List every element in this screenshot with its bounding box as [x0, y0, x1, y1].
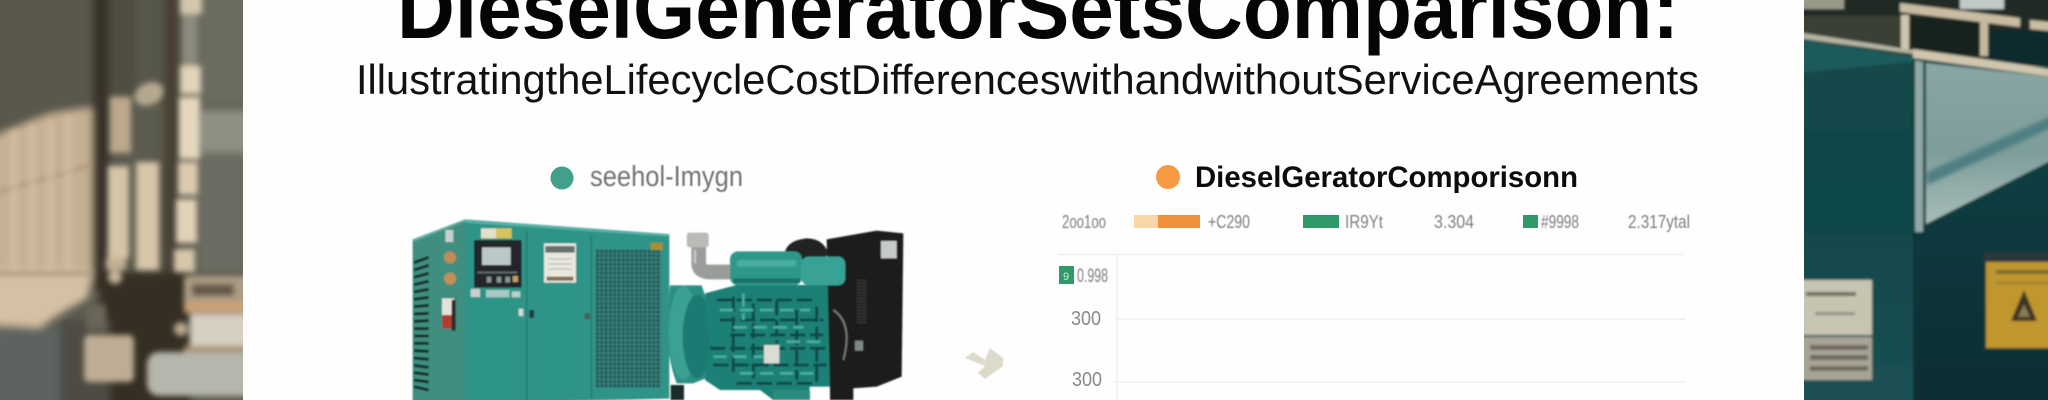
- chart legend row: [1062, 212, 1690, 232]
- cabinet front: [465, 219, 669, 400]
- legend: green swatch: [1303, 215, 1339, 228]
- chart: y axis label lower: 300: [1072, 369, 1102, 391]
- legend: green value: IR9Yt: [1345, 212, 1383, 232]
- warning label: [481, 228, 512, 238]
- photo: blurred industrial hall, left: [0, 0, 263, 400]
- subtitle: IllustratingtheLifecycleCostDifferenceswithandwithoutServiceAgreements: [356, 56, 1699, 103]
- legend: first label: 2oo1oo: [1062, 212, 1106, 232]
- legend: small green value: #9998: [1541, 212, 1579, 232]
- engine block: [705, 285, 837, 400]
- chart: y axis label upper: 300: [1071, 308, 1101, 330]
- base feet: [671, 385, 684, 400]
- control panel: [474, 240, 522, 288]
- illustration: diesel generator set: [413, 219, 903, 400]
- chart: green tag: 0.998: [1077, 266, 1108, 287]
- engine data plate: [764, 345, 779, 363]
- left heading text: seehol-Imygn: [590, 161, 743, 193]
- right heading text: DieselGeratorComporisonn: [1195, 161, 1578, 194]
- arrow: chevron between panels: [965, 348, 1003, 379]
- ventilation grille: [595, 249, 661, 388]
- data sticker: [544, 243, 576, 283]
- fuel tanks: [730, 251, 802, 285]
- door handles: [519, 309, 523, 316]
- icon: orange dot: [1156, 165, 1180, 189]
- knobs: [444, 251, 456, 263]
- legend: orange value: +C290: [1208, 212, 1250, 232]
- door lines: [527, 231, 591, 400]
- cabinet side: [413, 219, 465, 400]
- chart: gridlines and axis: [1058, 254, 1686, 400]
- chart: green tag: [1059, 266, 1108, 287]
- legend: small green swatch: [1523, 215, 1538, 228]
- alternator: [668, 285, 710, 383]
- legend: orange swatch: [1134, 215, 1200, 228]
- emergency box: [442, 298, 454, 315]
- icon: teal dot: [550, 166, 574, 190]
- exhaust pipe: [699, 246, 733, 272]
- turbo: [785, 238, 828, 260]
- legend: last value: 2.317ytal: [1628, 212, 1690, 232]
- side vents: [414, 257, 429, 390]
- legend: middle value: 3.304: [1434, 212, 1474, 232]
- right panel heading: [1156, 161, 1578, 194]
- chart: green tag: 9: [1063, 271, 1069, 283]
- photo: teal enclosure with warning signs, right: [1790, 0, 2048, 400]
- small labels: [471, 289, 480, 297]
- radiator: [827, 231, 903, 390]
- left panel heading: [550, 161, 743, 193]
